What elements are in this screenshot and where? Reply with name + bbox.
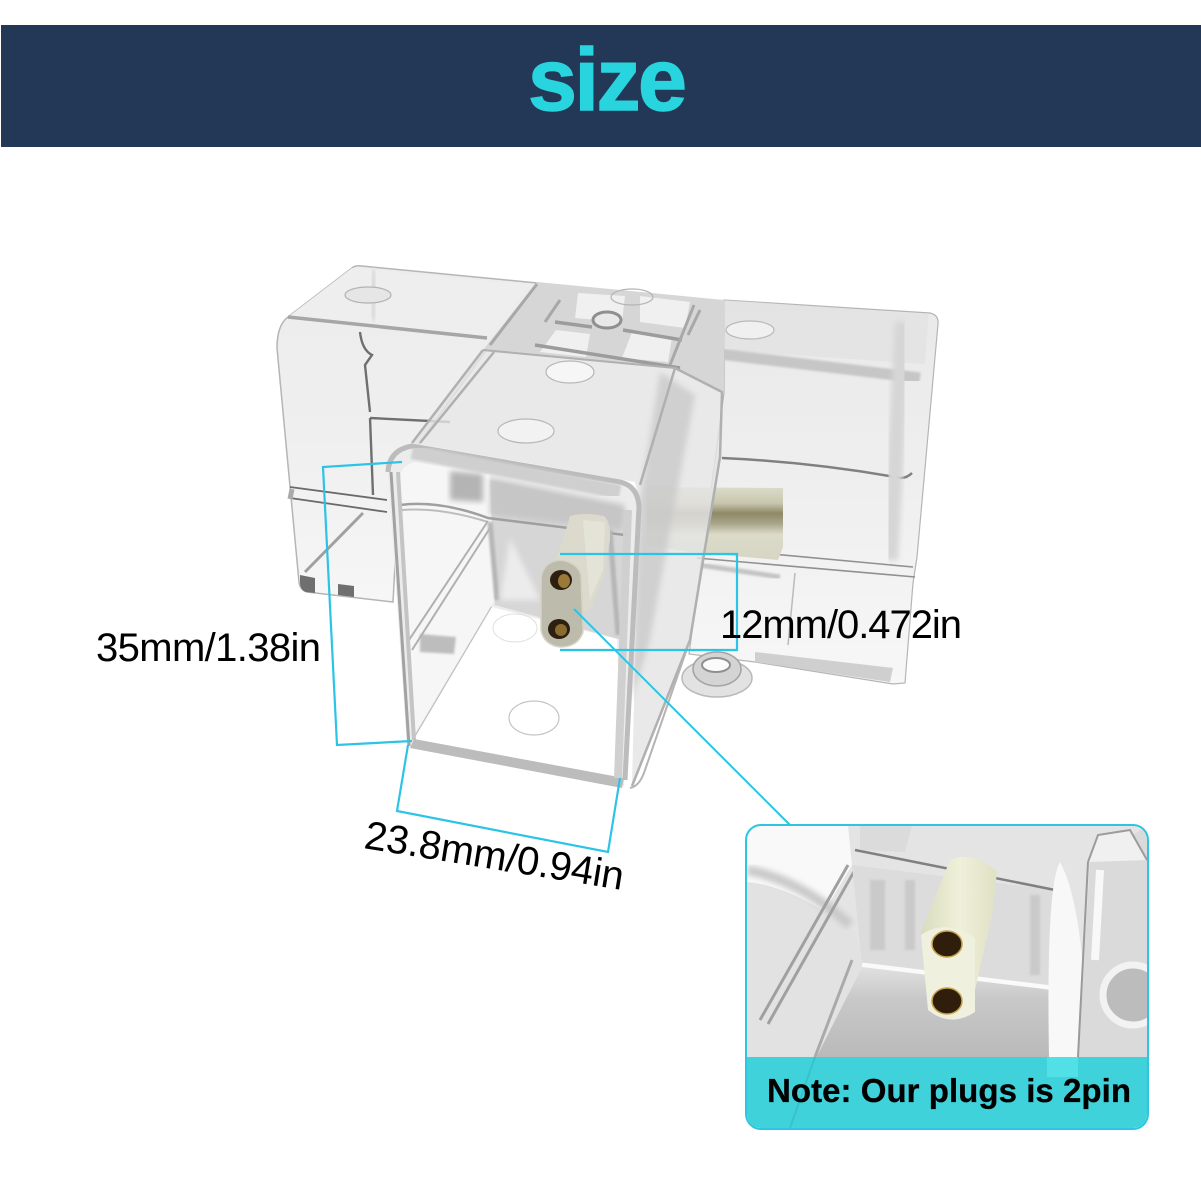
header banner xyxy=(1,25,1201,147)
screw circle xyxy=(345,287,391,303)
centre junction with moulded ribs xyxy=(483,282,724,393)
back body left xyxy=(277,266,537,602)
label: 23.8mm: 23.8mm/0.94in xyxy=(362,813,627,899)
screw circle xyxy=(726,321,774,339)
tube upper and side walls xyxy=(412,350,722,786)
back connector plug xyxy=(647,487,783,560)
label: 35mm: 35mm/1.38in xyxy=(96,626,321,670)
tube front frame, left wall xyxy=(388,443,639,786)
title: size xyxy=(528,30,687,129)
product photo: clear T-shaped housing xyxy=(277,266,938,788)
close-up plug xyxy=(921,857,997,1020)
floor xyxy=(815,967,1052,1060)
left wall xyxy=(747,826,852,911)
front plug with two pins xyxy=(541,514,610,647)
dimension line: tube width xyxy=(397,745,620,852)
dimension line: plug width xyxy=(560,554,737,650)
note band xyxy=(747,1057,1147,1129)
tube edges xyxy=(388,446,690,788)
back wall xyxy=(852,867,858,876)
inset border xyxy=(746,825,1148,1129)
tube floor xyxy=(414,607,622,778)
dimension line: height xyxy=(323,462,412,745)
mounting ring xyxy=(682,652,752,697)
inset panel: plug close-up xyxy=(746,825,1163,1129)
right column xyxy=(1048,862,1084,1057)
back body right xyxy=(689,300,938,684)
leader line to inset xyxy=(574,609,791,826)
label: 12mm: 12mm/0.472in xyxy=(720,603,962,647)
note text: Note: Our plugs is 2pin xyxy=(767,1072,1131,1109)
